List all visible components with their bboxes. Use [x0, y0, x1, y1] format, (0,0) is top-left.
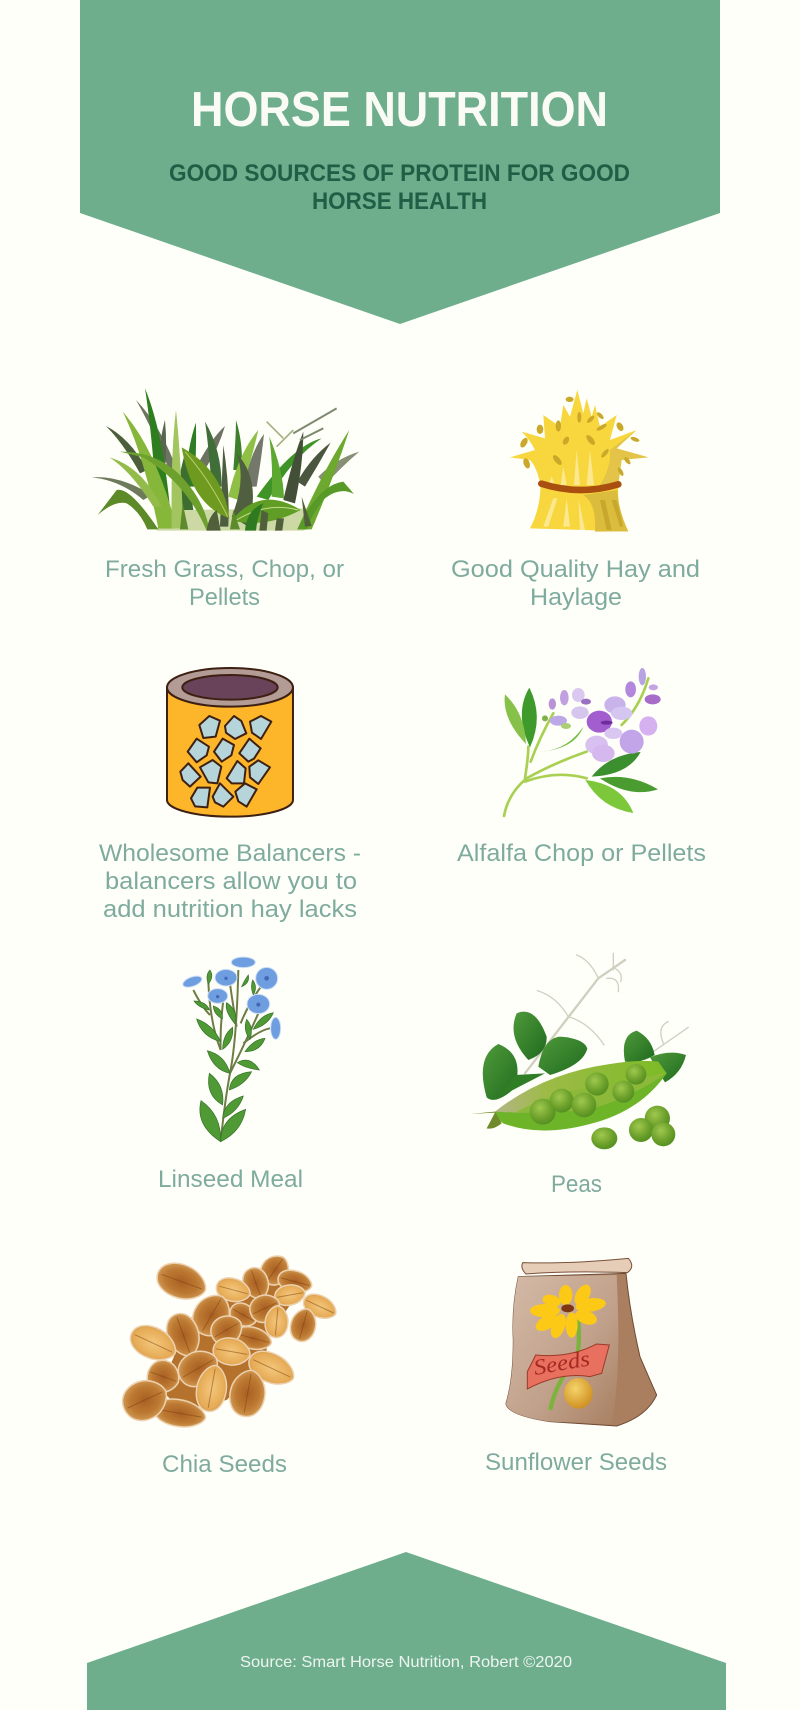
- icon: feed tub: [167, 668, 293, 817]
- subtitle: [169, 160, 630, 215]
- icon: seed bag: [506, 1258, 657, 1426]
- header banner: [80, 0, 720, 324]
- item: balancers: [99, 668, 361, 923]
- item: peas: [470, 953, 688, 1198]
- label: balancers: [99, 840, 361, 923]
- item: linseed: [158, 957, 303, 1193]
- icon: alfalfa sprig: [504, 668, 661, 816]
- tendrils: [525, 953, 688, 1073]
- label: hay: Haylage: [530, 584, 622, 611]
- footer shape: [87, 1552, 726, 1710]
- label: grass: Pellets: [189, 584, 260, 611]
- flowers: [542, 668, 661, 762]
- label: hay: [451, 556, 700, 611]
- label: linseed: Linseed Meal: [158, 1166, 303, 1193]
- title: HORSE NUTRITION: [191, 83, 608, 137]
- banner shape: [80, 0, 720, 324]
- subtitle: GOOD SOURCES OF PROTEIN FOR GOOD: [169, 160, 630, 187]
- icon: flax plant: [181, 957, 281, 1142]
- ribbon: [527, 1344, 609, 1389]
- subtitle: HORSE HEALTH: [312, 188, 487, 215]
- leaves: [194, 970, 273, 1142]
- label: balancers: Wholesome Balancers -: [99, 840, 361, 867]
- label: balancers: add nutrition hay lacks: [103, 896, 357, 923]
- label: sunflower: Sunflower Seeds: [485, 1449, 667, 1476]
- pod: [495, 1061, 667, 1130]
- label: hay: Good Quality Hay and: [451, 556, 700, 583]
- flowers: [181, 957, 281, 1039]
- label: grass: [105, 556, 344, 611]
- icon: hay bundle: [510, 390, 648, 532]
- loose peas: [591, 1106, 675, 1149]
- ribbon text: Seeds: [532, 1345, 592, 1380]
- label: chia: Chia Seeds: [162, 1451, 287, 1478]
- flower stem: [551, 1320, 579, 1408]
- icon: pea pod: [470, 953, 688, 1149]
- item: hay: [451, 390, 700, 611]
- icon: grass: [92, 388, 359, 531]
- source text: Source: Smart Horse Nutrition, Robert ©2020: [240, 1654, 572, 1671]
- label: balancers: balancers allow you to: [105, 868, 357, 895]
- label: peas: Peas: [551, 1171, 602, 1198]
- icon: seeds: [116, 1250, 340, 1431]
- item: chia seeds: [116, 1250, 340, 1478]
- label: alfalfa: Alfalfa Chop or Pellets: [457, 840, 706, 867]
- pellets: [180, 716, 271, 807]
- footer banner: [87, 1552, 726, 1710]
- peas in pod: [530, 1064, 646, 1125]
- grains: [519, 397, 640, 477]
- label: grass: Fresh Grass, Chop, or: [105, 556, 344, 583]
- item: sunflower seeds: [485, 1258, 667, 1476]
- item: alfalfa: [457, 668, 706, 867]
- leaves: [483, 1012, 686, 1100]
- item: fresh grass: [92, 388, 359, 611]
- flower: [530, 1282, 607, 1340]
- rope: [541, 484, 618, 490]
- seed: [564, 1378, 593, 1409]
